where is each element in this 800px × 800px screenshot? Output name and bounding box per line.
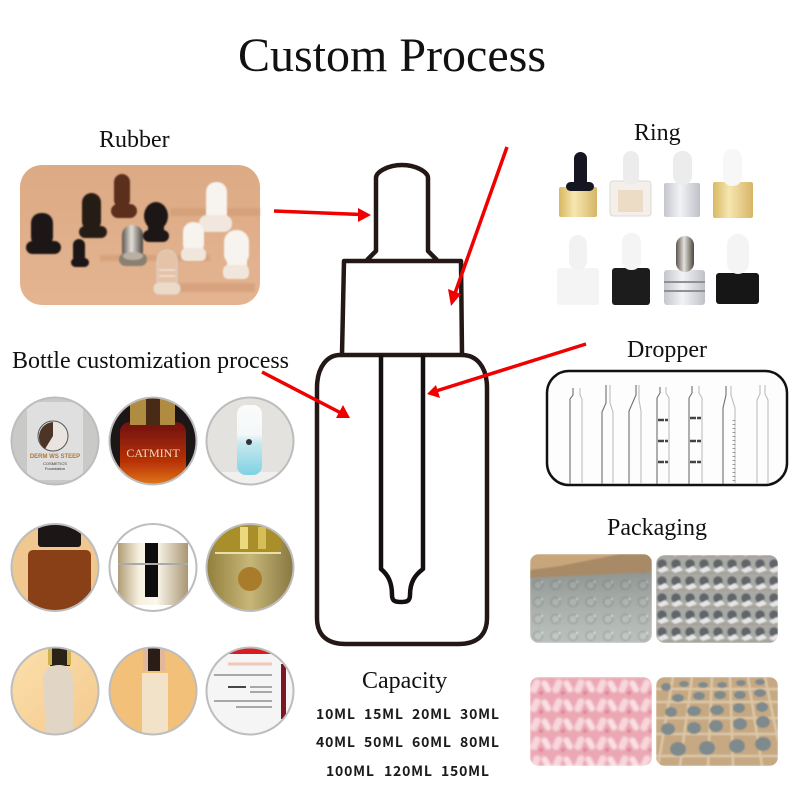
capacity list: 20ML — [412, 704, 451, 724]
circle: white label bottle: COSMETICS — [43, 461, 67, 466]
capacity list: 40ML — [316, 732, 355, 752]
circle: white label bottle — [10, 396, 100, 486]
arrow: rubber to bulb — [274, 208, 371, 222]
capacity list: 100ML — [326, 761, 374, 781]
icon: white bulb mid — [181, 222, 206, 261]
arrow: bottle customization to body — [262, 372, 350, 418]
photo: bottles in cardboard grid — [656, 677, 778, 766]
icon: black ribbed ring — [612, 233, 650, 305]
icon: glass ring white bulb — [610, 151, 651, 216]
circle: red Catmint bottle — [108, 396, 198, 488]
arrow: ring to collar — [448, 147, 507, 306]
icon: white ring white bulb — [557, 235, 599, 305]
collar — [342, 261, 462, 354]
icon: clear bulb — [154, 250, 180, 294]
icon: glass tubes — [570, 385, 768, 484]
capacity list: 60ML — [412, 732, 451, 752]
rubber bulbs group — [26, 174, 249, 294]
photo: bubble wrapped bottles — [530, 554, 652, 643]
arrow: dropper to pipette — [427, 344, 586, 398]
circle: white label with red band — [205, 646, 295, 736]
panel: ring samples — [557, 149, 759, 305]
circle: frosted bottle rose cap — [108, 646, 198, 736]
icon: silver ring white bulb — [664, 151, 700, 217]
dropper bulb — [367, 165, 437, 260]
icon: white bulb right — [223, 230, 249, 279]
heading: Packaging: Packaging — [607, 515, 707, 541]
heading: Dropper: Dropper — [627, 337, 707, 363]
icon: black round bulb — [143, 202, 169, 242]
circle: gold jar — [205, 522, 295, 614]
pipette — [381, 355, 423, 602]
title: Custom Process — [238, 29, 546, 82]
icon: black bulb small — [71, 239, 89, 267]
panel: bottle customization circles — [10, 396, 295, 736]
icon: black bulb tall — [79, 193, 107, 238]
capacity list: 30ML — [460, 704, 499, 724]
bottle body — [317, 355, 487, 644]
heading: Rubber: Rubber — [99, 127, 170, 153]
icon: black ring white bulb — [716, 234, 759, 304]
icon: brown bulb — [111, 174, 137, 218]
circle: frosted amber jar — [10, 522, 100, 616]
heading: Capacity: Capacity — [362, 668, 447, 694]
capacity list — [316, 704, 499, 781]
circle: red Catmint bottle: CATMINT — [126, 446, 180, 460]
capacity list: 150ML — [441, 761, 489, 781]
circle: white label bottle: DERM WS STEEP — [30, 454, 80, 460]
circle: blue gradient bottle — [205, 396, 295, 486]
capacity list: 50ML — [364, 732, 403, 752]
photo: bottles in divided box — [656, 555, 778, 643]
capacity list: 15ML — [364, 704, 403, 724]
capacity list: 10ML — [316, 704, 355, 724]
icon: gold ring black bulb — [559, 152, 597, 217]
icon: metal bulb — [119, 225, 147, 266]
icon: gold ring white bulb — [713, 149, 753, 218]
heading: Bottle customization process: Bottle customization process — [12, 348, 289, 374]
panel: dropper tubes — [547, 371, 787, 485]
photo shadows — [100, 208, 260, 292]
panel: packaging photos — [530, 554, 778, 766]
capacity list: 120ML — [384, 761, 432, 781]
panel: rubber photo — [20, 165, 260, 305]
circle: white tube gold cap — [10, 646, 100, 736]
icon: black bulb large — [26, 213, 61, 254]
circle: white label bottle: Foundation — [45, 466, 65, 471]
heading: Ring: Ring — [634, 120, 681, 146]
icon: white bulb tall — [199, 182, 232, 232]
capacity list: 80ML — [460, 732, 499, 752]
photo: pink packing peanuts — [530, 677, 652, 766]
bottle outline — [317, 165, 487, 644]
circle: silver black jar — [108, 522, 198, 614]
icon: silver bands ring metal bulb — [664, 236, 705, 305]
